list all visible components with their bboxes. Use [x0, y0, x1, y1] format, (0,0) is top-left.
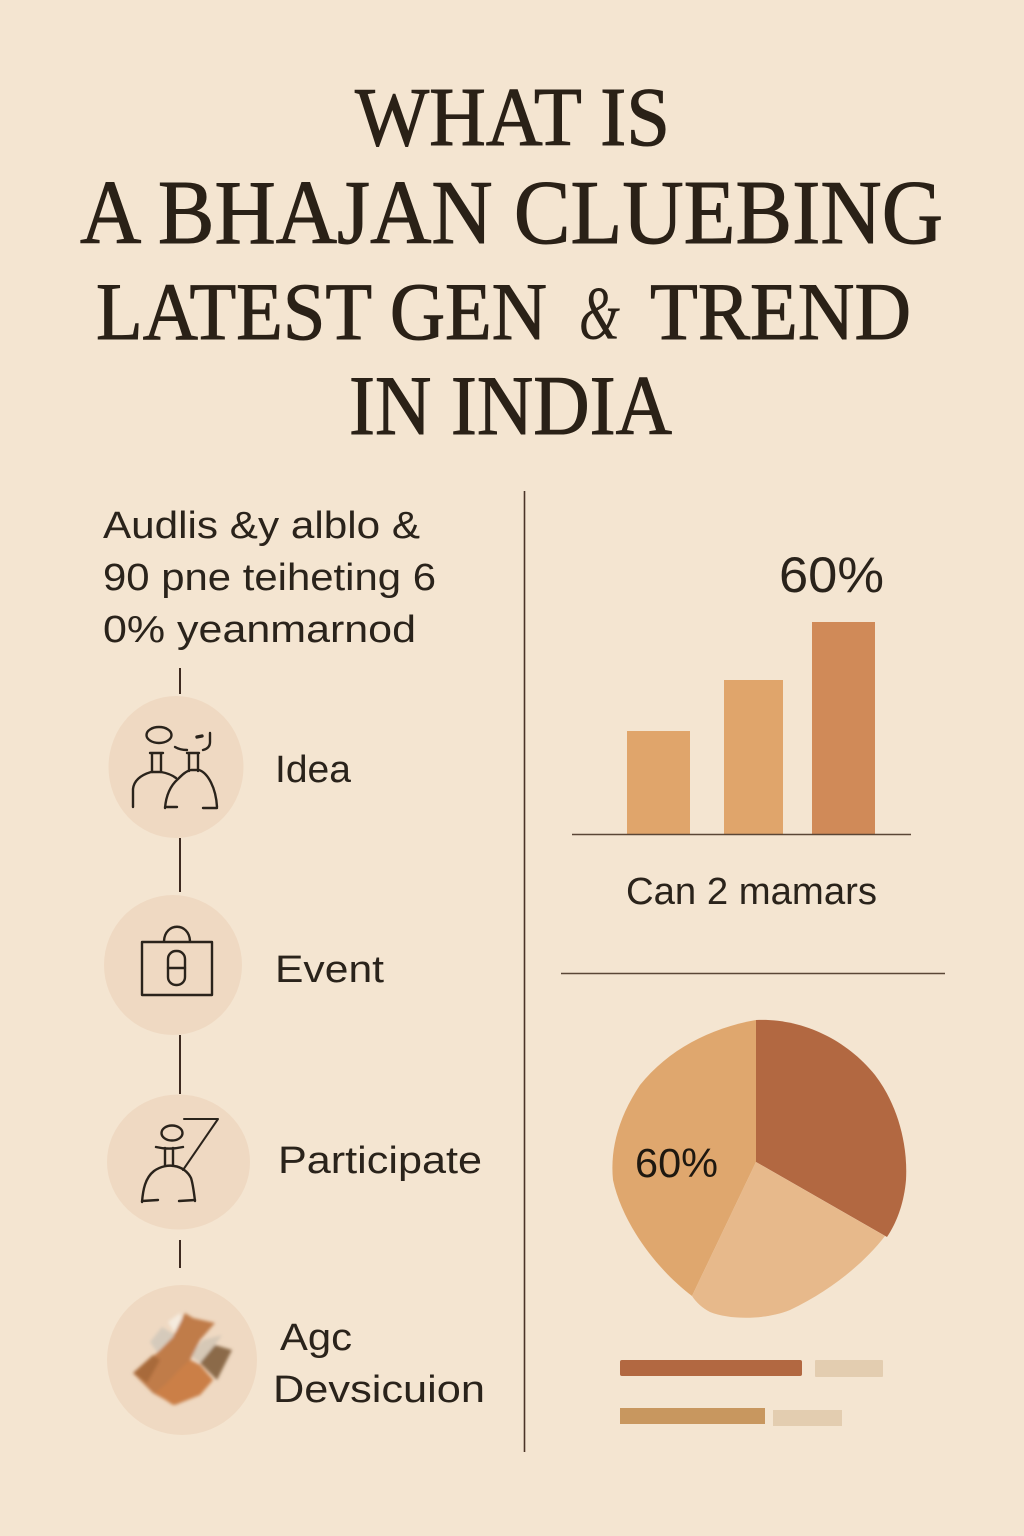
icon: two people: [108, 696, 244, 838]
title: WHAT IS: [355, 71, 670, 164]
bars: [627, 622, 875, 834]
value label: 60%: [779, 547, 884, 603]
step: participate: [107, 1094, 482, 1230]
bar chart: [572, 547, 911, 913]
intro text block: [103, 505, 436, 651]
chart caption: Can 2 mamars: [626, 871, 877, 913]
intro text block: 90 pne teiheting 6: [103, 557, 436, 599]
intro text block: Audlis &y alblo &: [103, 505, 420, 547]
slice: mid tan: [612, 1020, 756, 1296]
label: Devsicuion: [273, 1369, 485, 1411]
panel divider: [524, 491, 526, 1452]
slice: light: [692, 1162, 885, 1318]
icon: calendar bag: [104, 895, 242, 1035]
icon: abstract brown shape: [107, 1285, 257, 1435]
timeline connector lines: [179, 668, 181, 1268]
title: TREND: [650, 266, 911, 357]
pie label: 60%: [635, 1140, 718, 1186]
label: Agc: [280, 1317, 352, 1359]
section divider: [561, 972, 945, 974]
title: [80, 71, 943, 453]
label: [273, 1317, 485, 1411]
title: &: [579, 272, 620, 356]
label: Idea: [275, 749, 352, 791]
icon: person with flag: [107, 1094, 250, 1230]
label: Participate: [278, 1140, 482, 1182]
slice: dark: [756, 1020, 906, 1237]
title: IN INDIA: [349, 359, 672, 453]
step: age devotion: [107, 1285, 485, 1435]
label: Event: [275, 949, 384, 991]
step: idea: [108, 696, 352, 838]
intro text block: 0% yeanmarnod: [103, 609, 416, 651]
title: A BHAJAN CLUEBING: [80, 162, 943, 263]
pie chart: [612, 1020, 906, 1318]
legend bars: [620, 1360, 883, 1426]
title: LATEST GEN: [96, 266, 547, 357]
step: event: [104, 895, 384, 1035]
